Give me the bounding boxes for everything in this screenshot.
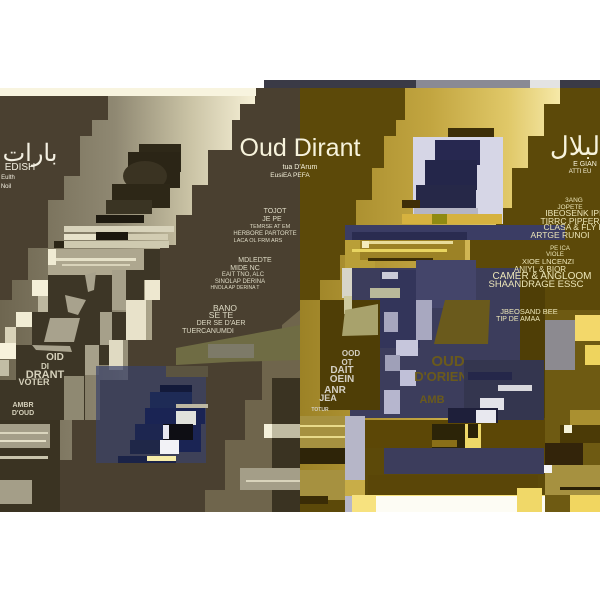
bottle name: OID <box>46 352 64 363</box>
notes center: DER SE D'AER <box>197 320 245 327</box>
notes center: TEMRSE AT EM <box>250 224 291 230</box>
olive overlay name: D'ORIENT <box>414 369 476 384</box>
notes center: SE TE <box>209 310 234 320</box>
bottle name right: OOD <box>342 349 360 358</box>
small boxes right <box>432 360 544 448</box>
logo left cropped: Noil <box>1 184 11 190</box>
bottle shoulder right <box>345 225 565 300</box>
light beam right <box>300 88 560 500</box>
logo right: لبلال <box>550 131 600 161</box>
bottle cap <box>54 144 181 248</box>
bottle name right <box>311 349 360 413</box>
top strip <box>264 80 600 88</box>
notes right: XIOE LNCENZI <box>522 257 574 266</box>
right edge bottle fragment <box>240 378 300 512</box>
logo center <box>240 134 360 179</box>
bottle name right: DAIT <box>330 365 354 376</box>
right edge bottle fragment <box>520 310 600 512</box>
bottle name right: OT <box>341 358 353 367</box>
notes right: TIP DE AMAA <box>496 316 540 323</box>
olive overlay name: AMB <box>419 394 445 406</box>
light beam left <box>0 96 255 512</box>
olive crest overlay <box>434 300 490 344</box>
notes right: TIRRC PIPFER <box>540 216 600 226</box>
bottle name: DI <box>41 362 49 371</box>
iridescent flare <box>176 325 300 365</box>
olive overlay name <box>414 353 476 406</box>
notes center: MDLEDTE <box>238 257 272 264</box>
notes right: JBEOSAND BEE <box>500 307 558 316</box>
notes center: HERBORE PARTORTE <box>233 231 297 237</box>
bottle base left <box>0 420 60 512</box>
notes right: ARTGE RUNOI <box>531 230 589 240</box>
bottle name right: TOTUR <box>311 407 329 413</box>
notes center <box>182 208 297 335</box>
notes center: BANO <box>213 303 237 313</box>
logo center: Oud Dirant <box>240 134 360 162</box>
laurel crest <box>32 272 96 352</box>
bottle name <box>12 352 65 417</box>
crest right <box>342 272 400 336</box>
bottle label right <box>311 260 545 418</box>
logo left cropped <box>1 140 57 190</box>
bottle name right: ANR <box>324 385 347 396</box>
notes center: JE PE <box>262 216 282 223</box>
notes right <box>488 197 600 323</box>
notes right: CAMER & ANGLOOM <box>493 271 591 282</box>
bottle base right <box>300 416 547 512</box>
notes right: VIOLE <box>546 252 564 258</box>
notes right: PE ICA <box>550 246 570 252</box>
bottle name: DRANT <box>26 369 65 381</box>
olive overlay name: OUD <box>431 353 465 370</box>
notes center: TOJOT <box>264 208 287 215</box>
logo left cropped: Eulth <box>1 175 15 181</box>
notes center: HNOLA AP DERINA T <box>210 285 260 291</box>
logo center: tua D'Arum <box>283 164 318 171</box>
logo left cropped: EDISH <box>5 162 35 173</box>
logo right <box>550 131 600 175</box>
logo center: EusiEA PEFA <box>270 172 310 179</box>
notes center: TUERCANUMDI <box>182 328 234 335</box>
bottle name right: JEA <box>319 393 337 403</box>
logo right: ATTI EU <box>569 169 591 175</box>
bottle name right: OEIN <box>330 374 354 385</box>
bottle name: AMBR <box>12 402 34 409</box>
notes center: LACA OL FRM ARS <box>234 238 283 244</box>
notes center: MIDE NC <box>230 265 260 272</box>
light beam lower right <box>205 310 300 512</box>
notes right: SHAANDRAGE ESSC <box>488 279 584 290</box>
bottle name: VOTER <box>18 377 50 387</box>
notes center: EAIT TNO, ALC <box>222 272 265 278</box>
notes right: JOPETE <box>557 204 583 211</box>
bottle name: D'OUD <box>12 410 34 417</box>
notes right: 3ANG <box>565 197 583 204</box>
left photo panel <box>0 88 300 512</box>
logo right: E GIAN <box>573 161 597 168</box>
right photo panel <box>264 80 600 512</box>
notes right: ANIYL & BIOR <box>514 265 566 274</box>
notes center: SINOLAP DERINA <box>215 279 265 285</box>
cap right <box>402 128 503 224</box>
bottle label left <box>0 249 160 420</box>
logo left cropped: بارات <box>3 140 57 167</box>
small boxes left <box>96 366 208 463</box>
